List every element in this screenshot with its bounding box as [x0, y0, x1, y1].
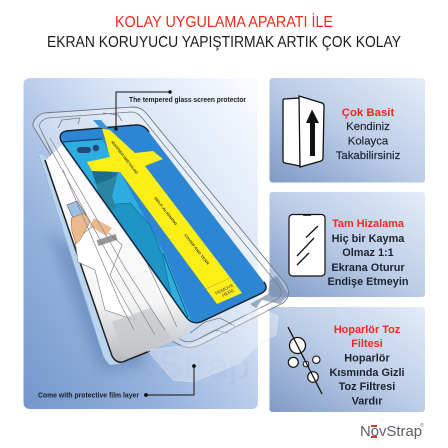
callout: film layer: [38, 364, 196, 400]
text: Çok Basit: Kendiniz: [346, 121, 390, 133]
screen protector: [60, 120, 266, 323]
text: Tam Hizalama: Ekrana Oturur: [331, 262, 405, 274]
phone shadow: [48, 230, 150, 370]
text: Hoparlör: [329, 324, 405, 408]
text: Hoparlör: Filtesi: [351, 338, 383, 350]
text: Çok Basit: Takabilirsiniz: [336, 150, 401, 162]
yellow tab: SELF-ALIGNING: [153, 196, 178, 226]
illustrated person arm: [67, 201, 172, 358]
yellow tab: REMOVE: [214, 283, 234, 296]
panel: Hoparlör Toz Filtresi: [270, 307, 425, 412]
text: Hoparlör: Vardır: [352, 396, 383, 408]
clear case: [33, 107, 289, 347]
logo: NovStrap: NovStrap: [360, 424, 422, 440]
text: Çok Basit: Kolayca: [348, 136, 389, 148]
text: Hoparlör: Kısmında Gizli: [329, 367, 405, 379]
yellow tab: HERE: [221, 288, 235, 298]
protective film layer: [147, 307, 278, 382]
illustrated person on screen: [60, 139, 192, 322]
case clips: [58, 113, 235, 338]
icon: screen with arrow: [283, 96, 324, 167]
callout: tempered glass: [114, 90, 246, 131]
text: Tam Hizalama: Olmaz 1:1: [342, 247, 394, 259]
text: Tam Hizalama: Endişe Etmeyin: [327, 276, 409, 288]
text: Hoparlör: Hoparlör: [344, 352, 390, 364]
title: EKRAN KORUYUCU YAPIŞTIRMAK ARTIK ÇOK KOLAY: [47, 34, 401, 51]
yellow tab: ADJUSTMENT DIRECTION AND: [110, 140, 139, 175]
phone body: [38, 133, 190, 365]
text: Tam Hizalama: Hiç bir Kayma: [332, 233, 405, 245]
title: KOLAY UYGULAMA APARATI İLE: [115, 13, 333, 31]
panel: Çok Basit: [270, 78, 425, 182]
watermark: NovStrap: [90, 345, 250, 386]
icon: phone alignment: [289, 214, 325, 276]
text: Hoparlör: Toz Filtresi: [339, 381, 395, 393]
text: Tam Hizalama: [327, 218, 409, 288]
inner case lines: [42, 133, 177, 335]
callout: tempered glass: The tempered glass screen protector: [129, 97, 246, 104]
panel: Tam Hizalama: [270, 192, 425, 297]
text: Hoparlör: Hoparlör Toz: [334, 324, 401, 336]
text: Çok Basit: Çok Basit: [342, 107, 394, 119]
text: Tam Hizalama: Tam Hizalama: [332, 218, 405, 230]
title: [47, 13, 401, 51]
callout: film layer: Come with protective film layer: [38, 392, 139, 400]
yellow tab: [87, 128, 242, 304]
panel: product illustration: [24, 78, 289, 409]
yellow tab: COVER AND TEAR: [183, 233, 210, 266]
logo: NovStrap: ®: [420, 422, 424, 429]
icon: speaker dust filter: [288, 327, 322, 394]
text: Çok Basit: [336, 107, 401, 162]
case corner tint: [250, 276, 289, 308]
